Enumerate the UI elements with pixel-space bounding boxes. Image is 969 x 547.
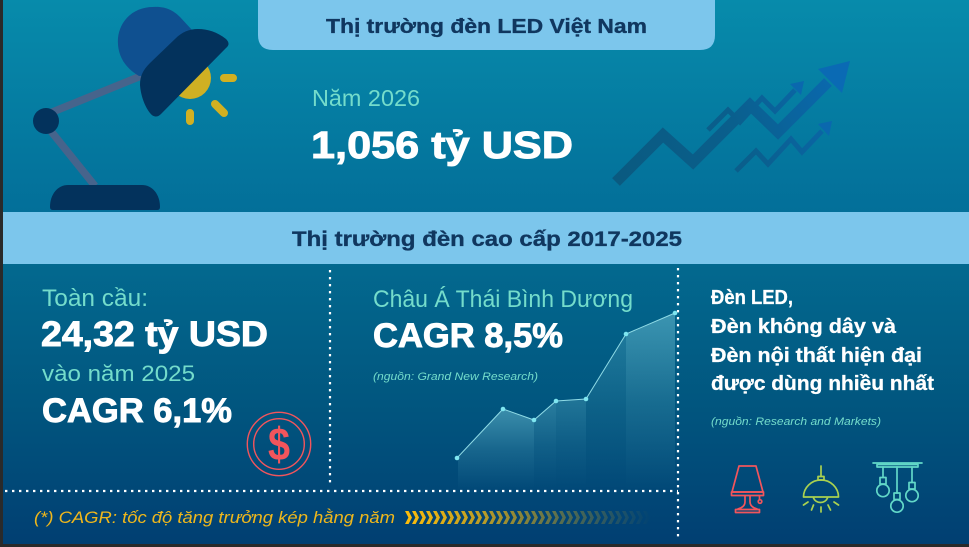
text: market size 2026: Năm 2026 (312, 85, 420, 111)
panel: Asia Pacific heading (373, 286, 633, 383)
panel: Asia Pacific heading: (nguồn: Grand New Research) (373, 371, 538, 383)
panel: most used lamps text (711, 287, 934, 428)
footnote: CAGR definition: (*) CAGR: tốc độ tăng trưởng kép hằng năm (34, 508, 395, 527)
panel: most used lamps text: Đèn nội thất hiện đại (711, 345, 922, 367)
panel: most used lamps text: (nguồn: Research and Markets) (711, 416, 881, 428)
panel: global market: CAGR 6,1% (42, 392, 232, 430)
title tab (258, 0, 715, 50)
area line chart (455, 311, 677, 490)
text: market size 2026: 1,056 tỷ USD (311, 125, 573, 167)
panel: global market: vào năm 2025 (42, 361, 195, 386)
icon: rising arrows (616, 61, 850, 182)
panel: global market: Toàn cầu: (42, 285, 148, 312)
text: market size 2026 (311, 85, 573, 167)
icon: desk lamp (33, 7, 233, 210)
icon: dollar coin: $ (268, 418, 290, 470)
icon: dollar coin (247, 412, 311, 476)
icon: pendant lamp (804, 466, 838, 512)
panel: most used lamps text: Đèn không dây và (711, 316, 897, 338)
panel: global market (41, 285, 268, 430)
panel: Asia Pacific heading: Châu Á Thái Bình Dương (373, 286, 633, 313)
section band heading (3, 212, 969, 264)
panel: most used lamps text: Đèn LED, (711, 287, 793, 309)
title tab: Thị trường đèn LED Việt Nam (326, 16, 647, 38)
panel: most used lamps text: được dùng nhiều nhất (711, 373, 934, 395)
section band heading: Thị trường đèn cao cấp 2017-2025 (292, 228, 682, 251)
decorative chevron strip (405, 511, 642, 524)
panel: global market: 24,32 tỷ USD (41, 315, 268, 354)
icon: ceiling bulbs (873, 463, 922, 512)
icon: table lamp (732, 466, 764, 512)
panel: Asia Pacific heading: CAGR 8,5% (373, 317, 563, 355)
